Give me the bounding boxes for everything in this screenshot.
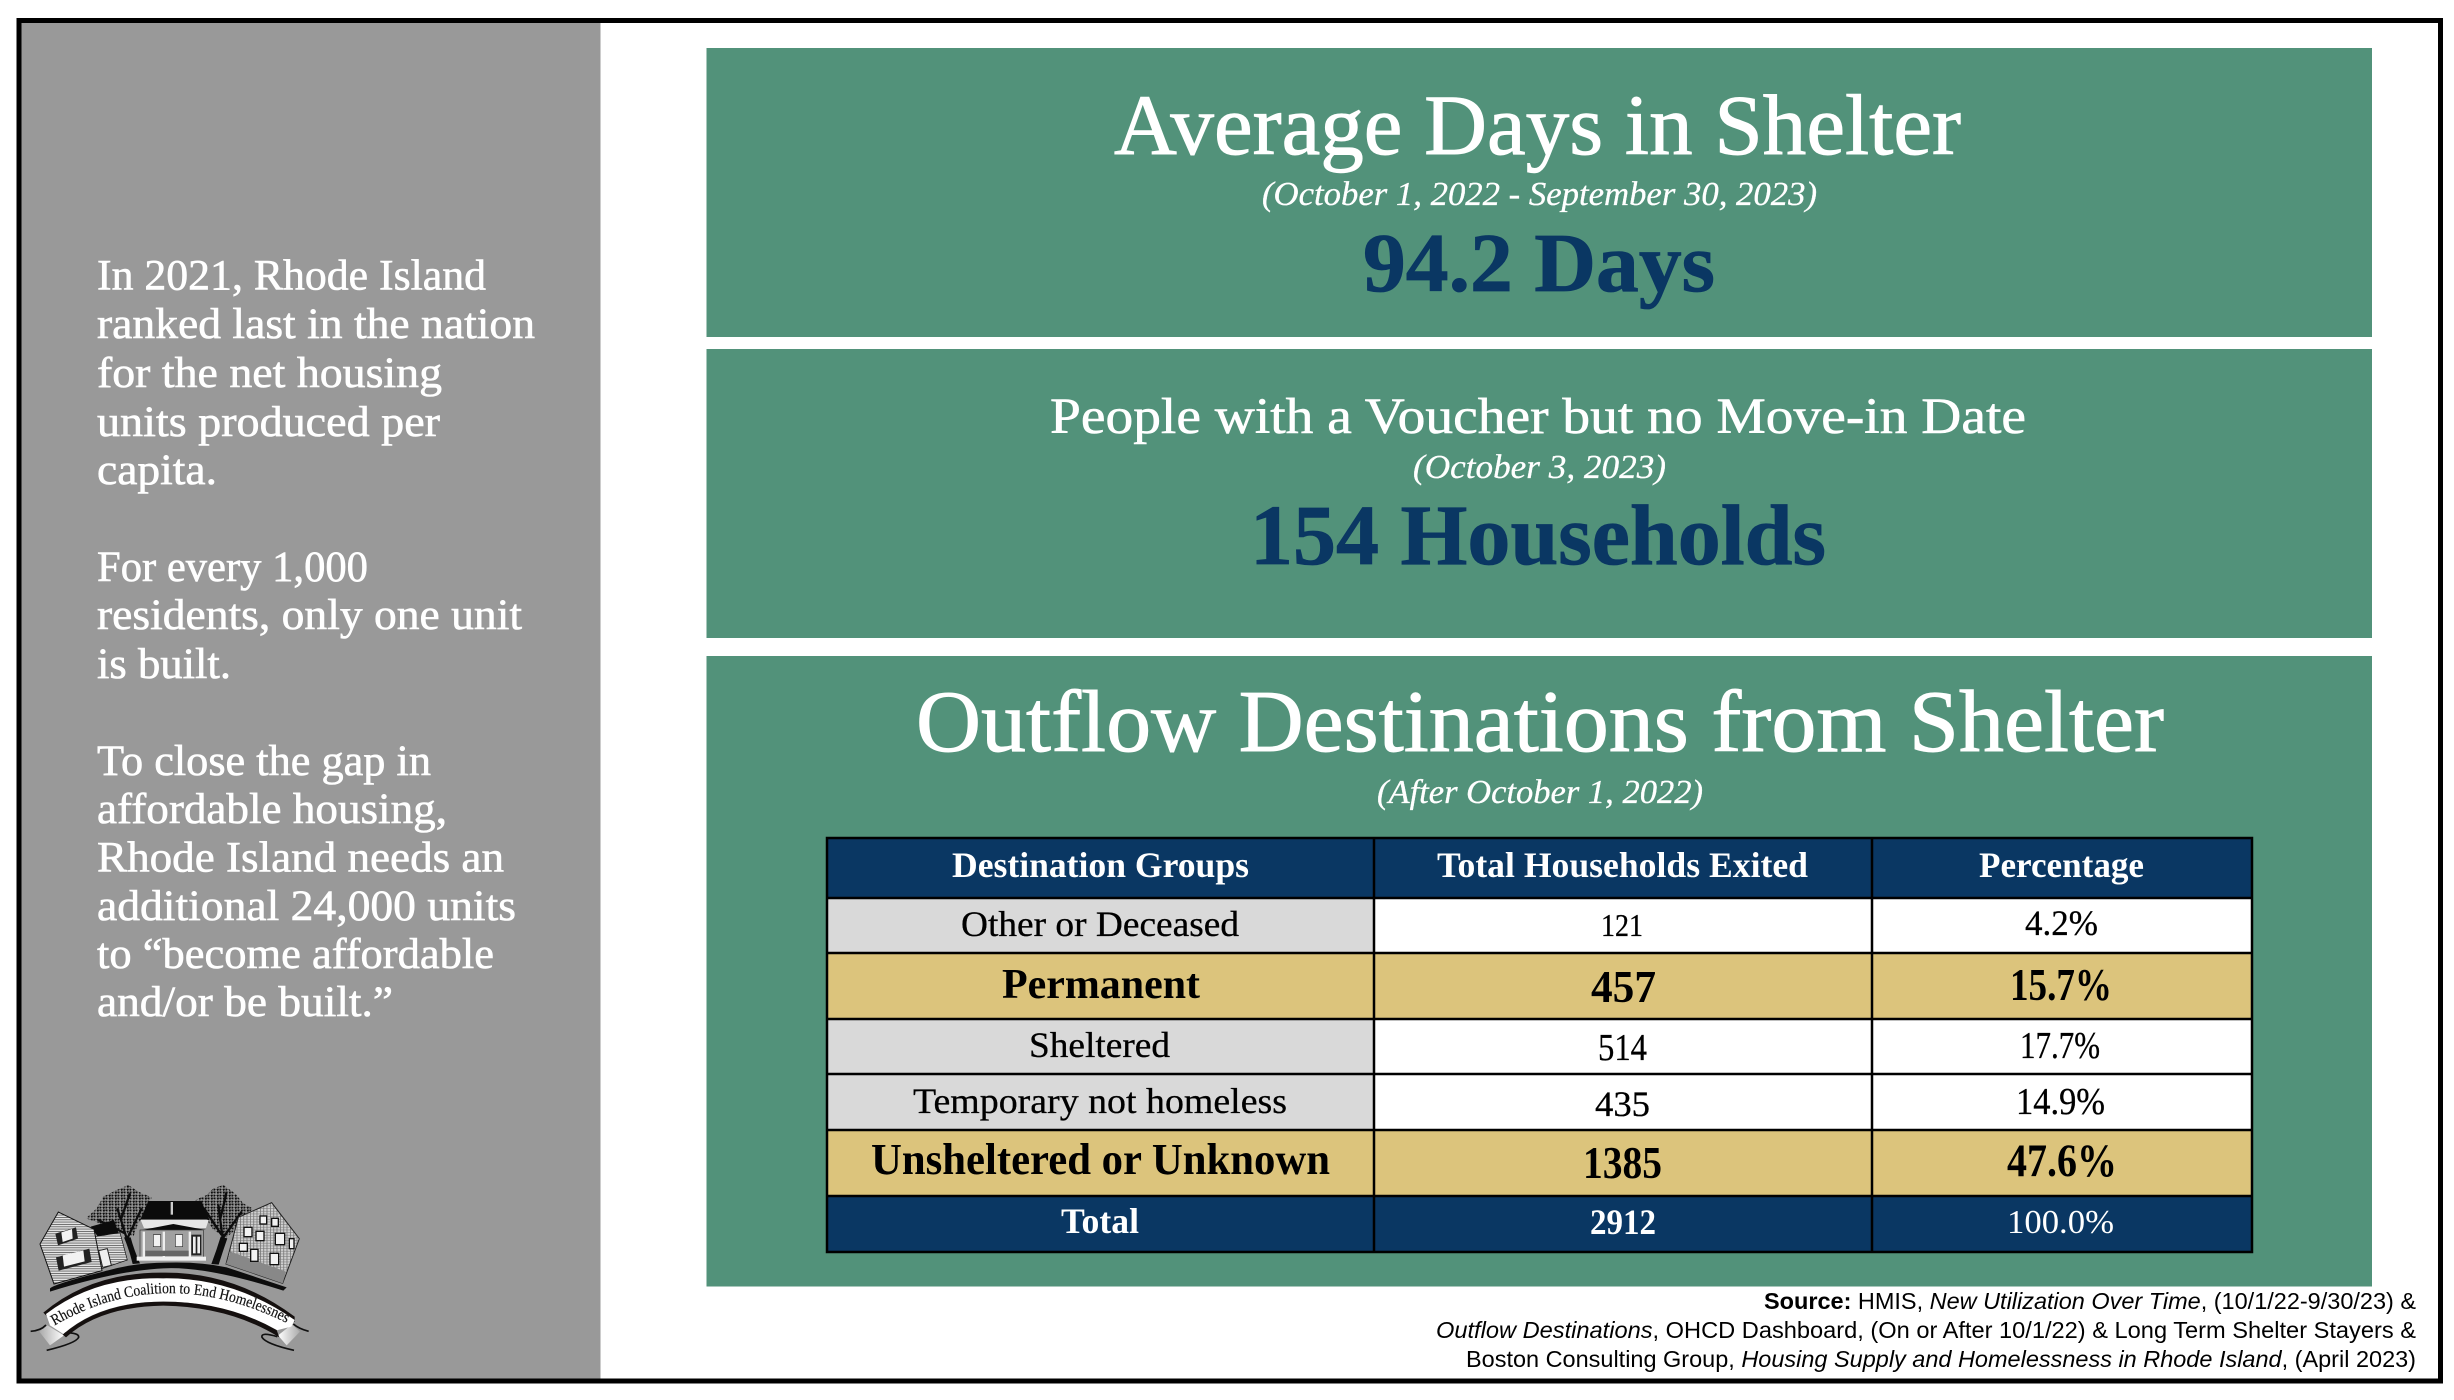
panel: housing facts sidebar [22, 23, 600, 1378]
row: permanent: 457 [1591, 961, 1656, 1012]
row: other or deceased: 121 [1601, 907, 1643, 943]
text block: housing production facts: In 2021, Rhode Island [97, 252, 486, 300]
text block: housing production facts: capita. [97, 447, 217, 494]
row: unsheltered or unknown: 1385 [1583, 1137, 1662, 1188]
panel: voucher without move-in date [706, 349, 2372, 638]
icon: right tree [195, 1185, 253, 1265]
text block: housing production facts: is built. [97, 641, 231, 688]
row: permanent: 15.7% [2010, 959, 2112, 1010]
table header row: Total Households Exited [1437, 845, 1808, 885]
text block: housing production facts: units produced per [97, 399, 440, 446]
row: sheltered: 17.7% [2020, 1025, 2100, 1067]
row: sheltered [1029, 1025, 2100, 1069]
row: permanent [1002, 959, 2112, 1012]
row: unsheltered or unknown: Unsheltered or Unknown [871, 1135, 1330, 1184]
row: other or deceased: 4.2% [2025, 903, 2098, 943]
panel: outflow destinations [706, 656, 2372, 1286]
text block: housing production facts: to “become affordable [97, 931, 494, 978]
row: temporary not homeless: 14.9% [2016, 1081, 2105, 1123]
text block: housing production facts: additional 24,000 units [97, 883, 516, 930]
heading: People with a Voucher but no Move-in Date [1050, 389, 2026, 445]
source citation: Boston Consulting Group, Housing Supply and Homelessness in Rhode Island , (April 2023) [1466, 1346, 2416, 1372]
date: (October 3, 2023) [1413, 449, 1666, 486]
source citation [1436, 1288, 2416, 1372]
text block: housing production facts: For every 1,000 [97, 544, 368, 591]
icon: ribbon band [43, 1272, 295, 1338]
table header row [952, 845, 2144, 885]
row: total [1061, 1201, 2114, 1242]
date range: (October 1, 2022 - September 30, 2023) [1262, 176, 1817, 213]
logo: Rhode Island Coalition to End Homelessness [30, 1185, 309, 1352]
row: sheltered: Sheltered [1029, 1025, 1170, 1065]
source citation: Source: HMIS, New Utilization Over Time, (10/1/22-9/30/23) & [1764, 1288, 2416, 1314]
row: temporary not homeless [913, 1081, 2105, 1124]
table header row: Destination Groups [952, 845, 1249, 885]
table header row: Percentage [1979, 845, 2144, 885]
text block: housing production facts: ranked last in the nation [97, 301, 535, 348]
row: total: 100.0% [2007, 1204, 2114, 1241]
icon: left tree [86, 1185, 152, 1264]
row: unsheltered or unknown: 47.6% [2007, 1135, 2117, 1187]
row: other or deceased [961, 903, 2098, 944]
icon: right house [226, 1203, 299, 1283]
panel: average days in shelter [706, 48, 2372, 337]
date: (After October 1, 2022) [1377, 774, 1703, 811]
row: total: 2912 [1590, 1202, 1656, 1242]
row: other or deceased: Other or Deceased [961, 904, 1239, 944]
row: sheltered: 514 [1598, 1027, 1647, 1069]
text block: housing production facts: and/or be built.” [97, 979, 393, 1026]
text block: housing production facts: To close the gap in [97, 738, 431, 785]
table: destination groups [827, 838, 2252, 1252]
row: unsheltered or unknown [871, 1135, 2117, 1188]
row: temporary not homeless: Temporary not homeless [913, 1081, 1287, 1121]
heading: Average Days in Shelter [1114, 77, 1961, 173]
source citation: Outflow Destinations, OHCD Dashboard, (On or After 10/1/22) & Long Term Shelter Stayers & [1436, 1317, 2416, 1343]
row: temporary not homeless: 435 [1595, 1084, 1650, 1124]
icon: ribbon tails [31, 1324, 309, 1350]
icon: centre house [137, 1201, 209, 1261]
row: total: Total [1061, 1201, 1139, 1241]
heading: Outflow Destinations from Shelter [916, 674, 2164, 771]
text block: housing production facts [97, 252, 535, 1026]
icon: left house [40, 1212, 127, 1284]
row: permanent: Permanent [1002, 962, 1200, 1008]
text block: housing production facts: Rhode Island needs an [97, 834, 504, 882]
text block: housing production facts: residents, only one unit [97, 592, 522, 639]
text block: housing production facts: for the net housing [97, 350, 442, 397]
text block: housing production facts: affordable housing, [97, 786, 447, 833]
stat: 154 households: 154 Households [1250, 487, 1826, 583]
ground [50, 1263, 287, 1292]
ribbon text: Rhode Island Coalition to End Homelessness [50, 1282, 289, 1326]
stat: 94.2 days: 94.2 Days [1363, 217, 1715, 310]
